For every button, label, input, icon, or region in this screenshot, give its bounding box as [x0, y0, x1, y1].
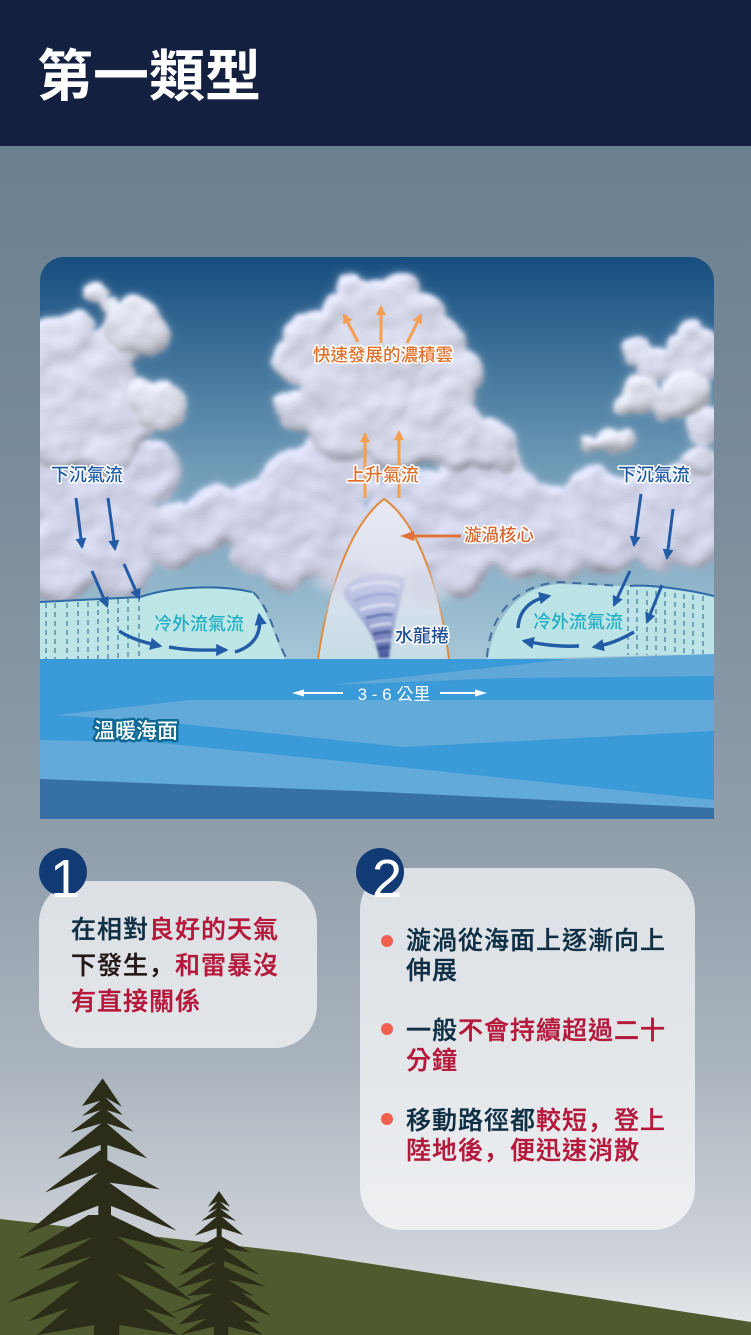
title: 第一類型: [37, 45, 261, 108]
text: bullet 2: 分鐘: [406, 1047, 458, 1075]
label: width: 3 - 6 公里: [358, 685, 430, 704]
arrow: width left: [292, 690, 343, 696]
label: rapid cumulus: 快速發展的濃積雲: [313, 345, 453, 365]
text: bullet 3: 陸地後，便迅速消散: [406, 1137, 640, 1165]
text: bullet 1: [406, 927, 666, 985]
badge: number 2 circle: [356, 848, 404, 896]
label: outflow left: 冷外流氣流: [154, 614, 244, 634]
arrows: updraft: [344, 307, 421, 498]
panel: card 1: [39, 881, 317, 1048]
text: bullet 1: 伸展: [406, 957, 458, 985]
label: warm sea: 溫暖海面: [94, 720, 178, 743]
text: card 1 body: 下發生，和雷暴沒: [71, 952, 279, 980]
panel: waterspout diagram: [40, 257, 714, 819]
badge: number 1: 1: [50, 849, 80, 909]
arrows: downdraft right: [614, 494, 673, 622]
arrows: outflow left: [119, 615, 260, 652]
text: card 1 body: [71, 916, 279, 1016]
clouds: [12, 273, 734, 602]
label: waterspout: 水龍捲: [395, 626, 449, 646]
badge: number 1 circle: [39, 848, 87, 896]
bullet 3: [381, 1113, 393, 1125]
badge: number 2: 2: [372, 849, 402, 909]
cold outflow: right: [487, 582, 714, 659]
arrows: downdraft left: [76, 498, 139, 606]
text: bullet 2: 一般不會持續超過二十: [406, 1017, 666, 1045]
text: bullet 1: 漩渦從海面上逐漸向上: [406, 927, 666, 955]
text: bullet 3: [406, 1107, 666, 1165]
text: card 1 body: 在相對良好的天氣: [71, 916, 279, 944]
label: downdraft left: 下沉氣流: [51, 465, 123, 485]
label: updraft: 上升氣流: [347, 465, 419, 485]
panel: card 2: [360, 868, 695, 1230]
warm sea surface: [40, 654, 714, 819]
text: bullet 3: 移動路徑都較短，登上: [406, 1107, 666, 1135]
arrow: vortex core pointer: [400, 531, 461, 541]
bullet 1: [381, 935, 393, 947]
label: vortex core: 漩渦核心: [464, 525, 534, 545]
arrow: width right: [440, 690, 487, 696]
bullet 2: [381, 1023, 393, 1035]
header band: [0, 0, 751, 146]
label: downdraft right: 下沉氣流: [618, 465, 690, 485]
arrows: outflow right: [518, 596, 634, 647]
cold outflow: left: [40, 587, 291, 666]
icon: waterspout funnel: [343, 573, 405, 658]
vortex core: [313, 499, 454, 659]
text: card 1 body: 有直接關係: [71, 988, 201, 1016]
label: outflow right: 冷外流氣流: [533, 612, 623, 632]
sky background: [40, 257, 714, 659]
text: bullet 2: [406, 1017, 666, 1075]
